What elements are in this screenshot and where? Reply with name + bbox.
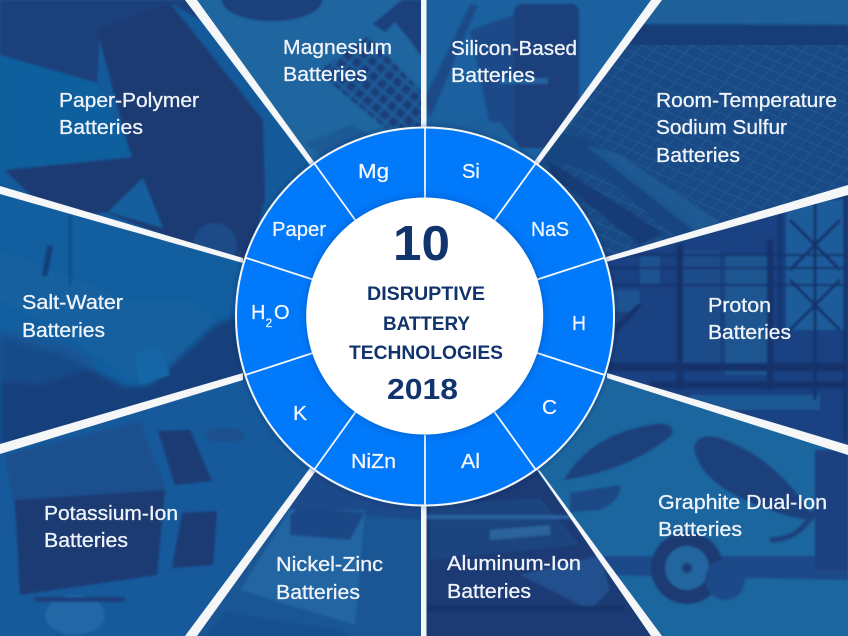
title text: DISRUPTIVE [367, 283, 485, 305]
label: aluminum-ion batteries: Batteries [447, 581, 531, 603]
label: nickel-zinc batteries: Nickel-Zinc [276, 554, 383, 576]
symbol labels: C [542, 397, 557, 419]
label: aluminum-ion batteries: Aluminum-Ion [447, 553, 581, 575]
label: silicon-based batteries [451, 38, 577, 87]
label: salt-water batteries: Salt-Water [22, 292, 123, 314]
panel: potassium-ion batteries [0, 370, 320, 636]
label: proton batteries: Batteries [708, 322, 791, 344]
panel: silicon-based batteries [426, 0, 651, 161]
label: salt-water batteries: Batteries [22, 320, 105, 342]
symbol labels: NiZn [351, 451, 396, 473]
panel: aluminum-ion batteries [424, 465, 664, 636]
title year: 2018 [387, 374, 458, 406]
label: silicon-based batteries: Batteries [451, 65, 535, 87]
label: magnesium batteries: Magnesium [283, 37, 392, 59]
label: graphite dual-ion batteries [658, 492, 827, 541]
panel: proton batteries [607, 195, 848, 445]
label: proton batteries [708, 295, 791, 344]
panel: paper-polymer batteries [0, 0, 320, 267]
label: potassium-ion batteries: Potassium-Ion [44, 503, 178, 525]
label: graphite dual-ion batteries: Graphite Dual-Ion [658, 492, 827, 514]
panel: graphite dual-ion batteries [530, 370, 848, 636]
symbol labels [251, 161, 586, 473]
label: magnesium batteries [283, 37, 392, 86]
title number: 10 [393, 217, 450, 271]
label: nickel-zinc batteries [276, 554, 383, 604]
label: salt-water batteries [22, 292, 123, 342]
panel: magnesium batteries [197, 0, 421, 162]
panel: room-temperature sodium sulfur batteries [530, 0, 848, 265]
title text: BATTERY [383, 313, 470, 335]
symbol labels: K [293, 403, 308, 425]
symbol labels: Si [462, 161, 480, 183]
label: paper-polymer batteries: Batteries [59, 117, 143, 139]
symbol labels: H [251, 302, 265, 324]
label: proton batteries: Proton [708, 295, 771, 317]
center disc: title [306, 198, 543, 434]
symbol labels: Al [461, 451, 480, 473]
label: magnesium batteries: Batteries [283, 64, 367, 86]
symbol labels: Paper [272, 219, 326, 241]
ring: element symbols wheel [236, 127, 614, 506]
symbol labels: 2 [266, 316, 272, 330]
title text [349, 283, 503, 364]
label: aluminum-ion batteries [447, 553, 581, 603]
symbol labels: O [274, 302, 290, 324]
label: paper-polymer batteries [59, 90, 199, 139]
title text: TECHNOLOGIES [349, 342, 503, 364]
symbol labels: H [572, 313, 586, 335]
label: room-temperature sodium sulfur batteries: Sodium Sulfur [656, 117, 787, 139]
label: nickel-zinc batteries: Batteries [276, 582, 360, 604]
panel: salt-water batteries [0, 194, 242, 444]
label: potassium-ion batteries: Batteries [44, 530, 128, 552]
label: potassium-ion batteries [44, 503, 178, 552]
label: paper-polymer batteries: Paper-Polymer [59, 90, 199, 112]
label: room-temperature sodium sulfur batteries: Batteries [656, 145, 740, 167]
label: graphite dual-ion batteries: Batteries [658, 519, 742, 541]
label: silicon-based batteries: Silicon-Based [451, 38, 577, 60]
symbol labels: NaS [531, 219, 569, 241]
symbol labels: Mg [358, 161, 389, 183]
panel: nickel-zinc batteries [240, 508, 383, 626]
label: room-temperature sodium sulfur batteries: Room-Temperature [656, 90, 837, 112]
label: room-temperature sodium sulfur batteries [656, 90, 837, 167]
